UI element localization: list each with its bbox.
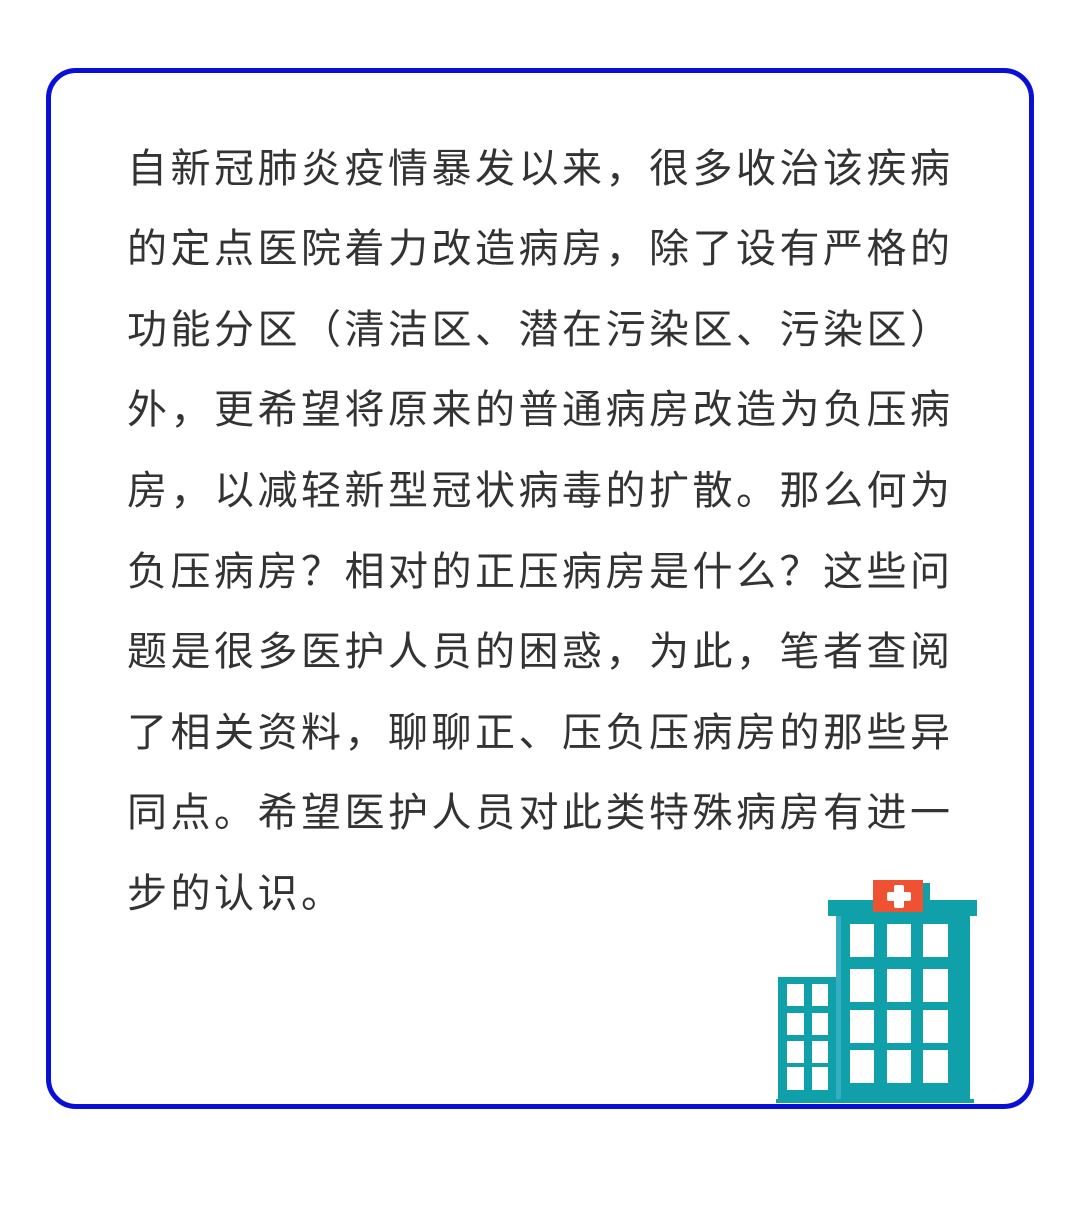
panel: blue rounded card xyxy=(46,68,1034,1109)
icon: red cross sign xyxy=(873,880,923,912)
text block: introduction paragraph: 房，以减轻新型冠状病毒的扩散。那么何为 xyxy=(127,469,954,513)
text block: introduction paragraph: 自新冠肺炎疫情暴发以来，很多收治该疾病 xyxy=(127,146,954,190)
icon: main tower xyxy=(776,883,977,1103)
text block: introduction paragraph: 负压病房？相对的正压病房是什么？这些问 xyxy=(127,550,954,594)
icon: hospital building xyxy=(776,880,977,1103)
text block: introduction paragraph: 题是很多医护人员的困惑，为此，笔者查阅 xyxy=(127,630,954,674)
text block: introduction paragraph: 外，更希望将原来的普通病房改造为负压病 xyxy=(127,388,954,432)
text block: introduction paragraph: 的定点医院着力改造病房，除了设有严格的 xyxy=(127,227,954,271)
text block: introduction paragraph: 步的认识。 xyxy=(127,872,344,916)
text block: introduction paragraph xyxy=(127,146,954,916)
icon: small side building xyxy=(778,977,837,1103)
text block: introduction paragraph: 功能分区（清洁区、潜在污染区、污染区） xyxy=(127,308,954,352)
text block: introduction paragraph: 同点。希望医护人员对此类特殊病房有进一 xyxy=(127,791,954,835)
text block: introduction paragraph: 了相关资料，聊聊正、压负压病房的那些异 xyxy=(127,711,954,755)
